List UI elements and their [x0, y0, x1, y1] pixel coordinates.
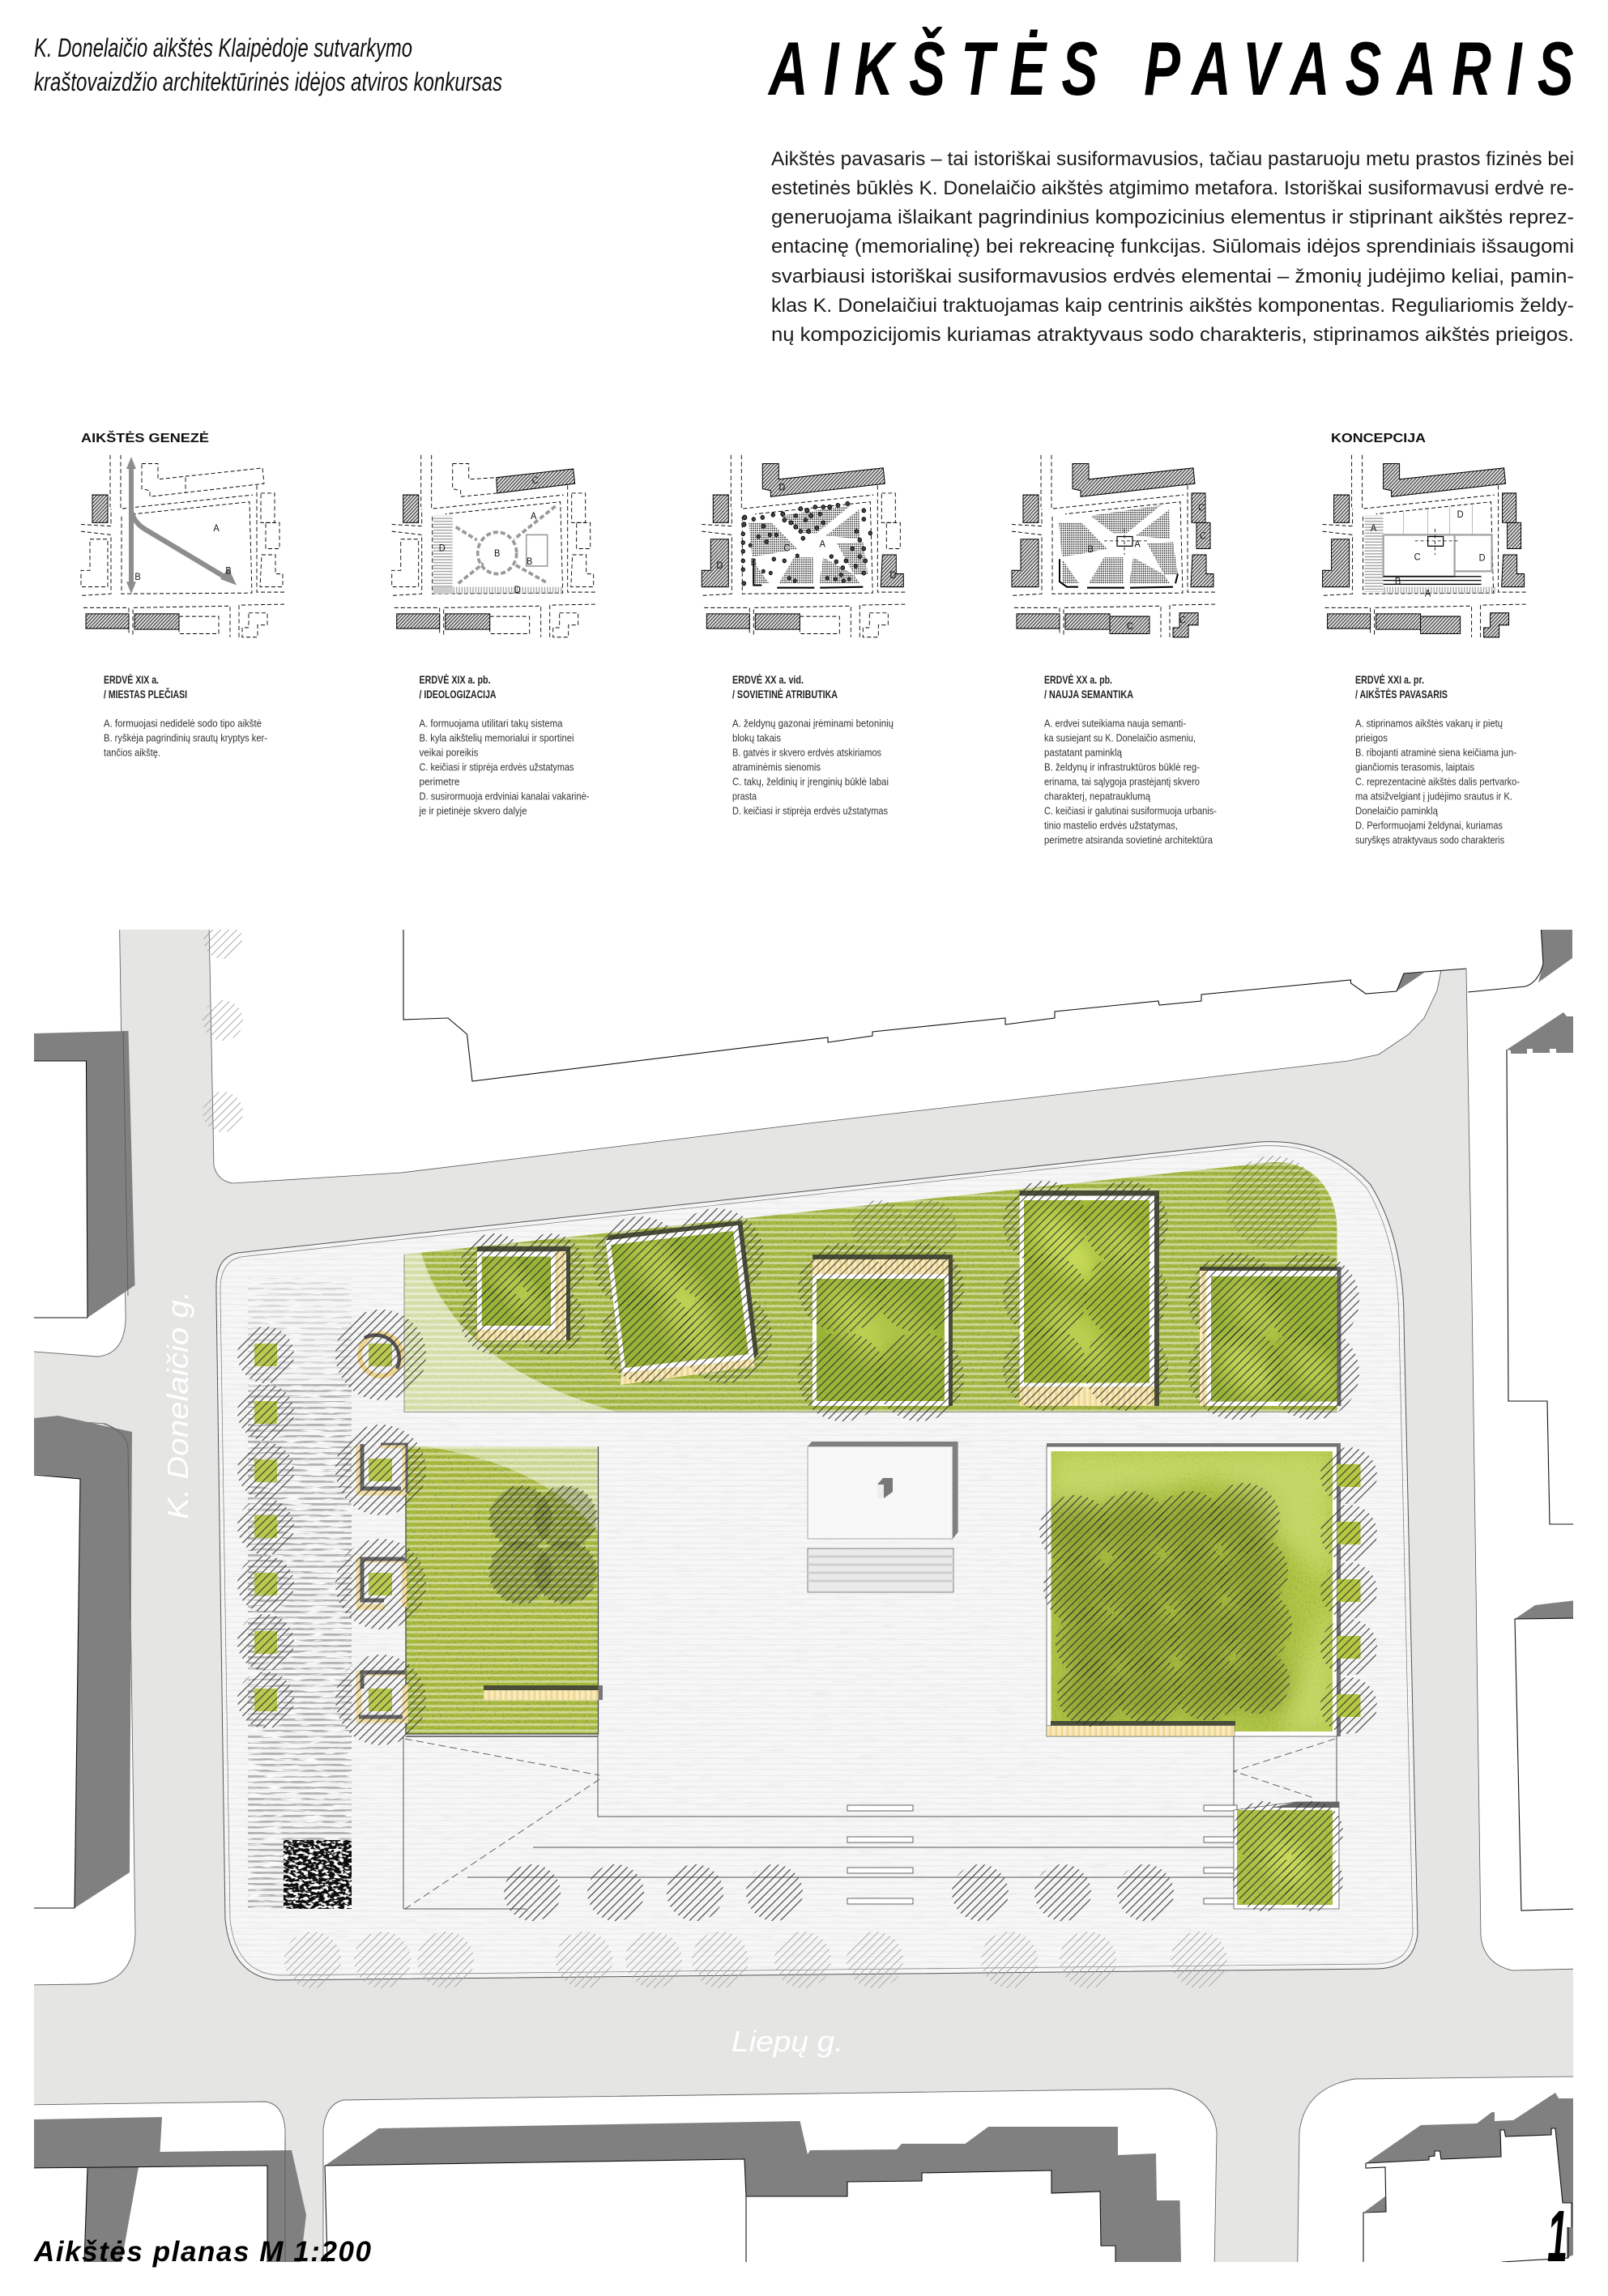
diagram 3: mid XX century: D [716, 561, 723, 571]
diagram 4: late XX century: C [1127, 622, 1133, 632]
tree pits right column [1320, 1447, 1377, 1734]
diagram 4: late XX century: C [1179, 616, 1186, 626]
caption column 4: tinio mastelio erdvės užstatymas, [1044, 820, 1178, 832]
plan scale caption: Aikštės planas M 1:200 [33, 2236, 372, 2268]
caption column 2: perimetre [420, 776, 460, 788]
text block: project description: Aikštės pavasaris – tai istoriškai susiformavusios, tačiau pastaruoju metu prastos fizinės bei [771, 148, 1574, 170]
caption column 5: giančiomis terasomis, laiptais [1355, 761, 1474, 773]
diagram 2: late XIX century: C [532, 476, 539, 486]
caption column 5: D. Performuojami želdynai, kuriamas [1355, 820, 1503, 832]
caption column 5: prieigos [1355, 732, 1388, 743]
caption column 4: erinama, tai sąlygoja prastėjantį skvero [1044, 776, 1200, 788]
text block: project description: nų kompozicijomis kuriamas atraktyvaus sodo charakteris, stiprinamos aikštės prieigos. [771, 324, 1574, 346]
street label: K. Donelaičio g.: K. Donelaičio g. [161, 1291, 194, 1519]
caption column 1: ERDVĖ XIX a. [104, 673, 159, 686]
caption column 3 [732, 673, 894, 817]
caption column 1: tančios aikštę. [104, 747, 160, 758]
diagram 2: late XIX century: B [494, 549, 500, 559]
diagram 4: late XX century: C [1200, 531, 1206, 542]
caption column 2: D. susirormuoja erdviniai kanalai vakarinė- [420, 790, 590, 803]
diagram 2: late XIX century: D [514, 586, 521, 595]
caption column 5 [1355, 673, 1520, 846]
left panel frame and wooden bench [406, 1446, 603, 1736]
caption column 2 [419, 673, 590, 817]
caption column 4: C. keičiasi ir galutinai susiformuoja urbanis- [1044, 805, 1217, 817]
diagram 3: mid XX century: B [751, 558, 757, 568]
text block: project description: estetinės būklės K. Donelaičio aikštės atgimimo metafora. Istoriškai susiformavusi erdvė re- [771, 177, 1574, 199]
diagram 1: XIX century: A [213, 524, 220, 534]
diagram 4: late XX century [1012, 455, 1216, 637]
caption column 2: B. kyla aikštelių memorialui ir sportinei [420, 732, 574, 743]
caption column 5: B. ribojanti atraminė siena keičiama jun- [1355, 747, 1516, 758]
caption column 5: A. stiprinamos aikštės vakarų ir pietų [1355, 718, 1503, 729]
caption column 2: C. keičiasi ir stiprėja erdvės užstatymas [420, 761, 574, 773]
caption column 5: Donelaičio paminklą [1355, 805, 1439, 817]
city blocks and surrounding buildings [24, 923, 1580, 2272]
diagram 1: XIX century [81, 455, 285, 637]
caption column 3: ERDVĖ XX a. vid. [732, 673, 804, 686]
caption column 2: / IDEOLOGIZACIJA [420, 688, 496, 701]
caption column 1: B. ryškėja pagrindinių srautų kryptys ker- [104, 732, 267, 743]
heading: genesis section: AIKŠTĖS GENEZĖ [81, 430, 209, 445]
diagram 2: late XIX century [392, 455, 596, 637]
caption column 3: B. gatvės ir skvero erdvės atskiriamos [732, 747, 881, 758]
diagram 2: late XIX century: B [527, 556, 532, 567]
caption column 1: / MIESTAS PLEČIASI [104, 687, 187, 701]
caption column 4: charakterį, nepatrauklumą [1044, 790, 1151, 803]
terrace lines and stairs [403, 1734, 1337, 1909]
band lawn bottom edge [404, 1254, 1337, 1412]
diagram 4: late XX century: C [1198, 503, 1205, 513]
diagram 4: late XX century: B [1087, 544, 1094, 555]
diagram 3: mid XX century [702, 455, 906, 637]
paving strip along Donelaičio street [248, 1278, 352, 1910]
text block: project description: svarbiausi istoriškai susiformavusios erdvės elementai – žmonių judėjimo keliai, pamin- [771, 266, 1574, 288]
diagram 3: mid XX century: C [783, 543, 790, 554]
caption column 4: / NAUJA SEMANTIKA [1044, 688, 1133, 701]
caption column 4: B. želdynų ir infrastruktūros būklė reg- [1044, 761, 1200, 773]
mottled dark paving block [284, 1840, 352, 1909]
caption column 1 [104, 673, 267, 758]
planter C [798, 1243, 964, 1421]
diagram 5: concept XXI century: D [1457, 510, 1464, 520]
caption column 1: A. formuojasi nedidelė sodo tipo aikštė [104, 718, 262, 729]
caption column 2: veikai poreikis [420, 747, 479, 758]
text block: project description: generuojama išlaikant pagrindinius kompozicinius elementus ir stiprinant aikštės reprez- [771, 207, 1574, 228]
caption column 5: C. reprezentacinė aikštės dalis pertvarko- [1355, 776, 1520, 788]
caption column 3: D. keičiasi ir stiprėja erdvės užstatymas [732, 805, 888, 817]
tree crowns over top lawn [851, 1156, 1320, 1254]
diagram 3: mid XX century: D [889, 571, 896, 581]
diagram 5: concept XXI century: D [1479, 553, 1486, 564]
caption column 5: suryškęs atraktyvaus sodo charakteris [1355, 834, 1504, 846]
caption column 4: ERDVĖ XX a. pb. [1044, 673, 1112, 686]
site plan [24, 920, 1580, 2272]
caption column 3: A. želdynų gazonai įrėminami betoninių [732, 718, 894, 729]
caption column 5: / AIKŠTĖS PAVASARIS [1355, 687, 1448, 701]
tree row: inner south alley [504, 1864, 1174, 1921]
caption column 5: ma atsižvelgiant į judėjimo srautus ir K. [1355, 790, 1512, 803]
diagram 5: concept XXI century: A [1425, 589, 1431, 599]
monument platform [808, 1442, 958, 1539]
caption column 2: ERDVĖ XIX a. pb. [420, 673, 491, 686]
planter E [1188, 1253, 1359, 1420]
tree row: Liepų street edge [284, 1932, 1227, 1988]
text block: project description: entacinę (memorialinę) bei rekreacinę funkcijas. Siūlomais idėjos sprendiniais išsaugomi [771, 236, 1574, 258]
subtitle: competition name [34, 33, 502, 96]
planter D [1003, 1181, 1168, 1411]
subtitle: competition name: K. Donelaičio aikštės Klaipėdoje sutvarkymo [34, 33, 412, 62]
plaza surface [211, 1134, 1426, 1984]
top lawn band [404, 1158, 1337, 1412]
diagram 3: mid XX century: D [778, 483, 785, 493]
text block: project description [771, 148, 1574, 346]
caption column 4 [1044, 673, 1217, 846]
diagram 1: XIX century: B [225, 566, 232, 577]
caption column 3: / SOVIETINĖ ATRIBUTIKA [732, 688, 838, 701]
caption column 3: C. takų, želdinių ir įrenginių būklė labai [732, 776, 889, 788]
caption column 5: ERDVĖ XXI a. pr. [1355, 673, 1424, 686]
diagram 5: concept XXI century: C [1414, 552, 1421, 563]
steps block [808, 1548, 953, 1592]
street label: Liepų g.: Liepų g. [731, 2025, 843, 2058]
caption column 4: A. erdvei suteikiama nauja semanti- [1044, 718, 1186, 729]
planter B tilted [593, 1208, 772, 1385]
caption column 3: prasta [732, 790, 757, 803]
diagram 1: XIX century: B [134, 573, 141, 582]
small planter lower right [1233, 1801, 1343, 1911]
caption column 3: atraminėmis sienomis [732, 761, 821, 773]
road surface [34, 930, 1573, 2262]
diagram 4: late XX century: A [1134, 539, 1141, 549]
heading: concept section: KONCEPCIJA [1331, 432, 1426, 445]
left panel tree canopy hatch [488, 1485, 598, 1604]
planter A [460, 1233, 585, 1354]
caption column 2: A. formuojama utilitari takų sistema [420, 718, 563, 729]
caption column 4: ka susiejant su K. Donelaičio asmeniu, [1044, 732, 1196, 743]
circular and square seats with trees [335, 1310, 426, 1745]
text block: project description: klas K. Donelaičiui traktuojamas kaip centrinis aikštės komponentas. Reguliariomis želdy- [771, 295, 1574, 317]
diagram 2: late XIX century: A [531, 512, 537, 522]
caption column 4: pastatant paminklą [1044, 747, 1123, 758]
title: AIKŠTĖS PAVASARIS [767, 27, 1574, 112]
caption column 3: blokų takais [732, 732, 781, 743]
caption column 4: perimetre atsiranda sovietinė architektūra [1044, 834, 1213, 846]
sheet number: 1 [1547, 2196, 1567, 2277]
diagram 2: late XIX century: D [439, 543, 446, 554]
tree pits left column [237, 1327, 294, 1728]
right lawn panel [1039, 1443, 1341, 1736]
left lawn panel [406, 1446, 598, 1734]
diagram 5: concept XXI century [1323, 455, 1527, 637]
diagram 5: concept XXI century: A [1371, 524, 1377, 534]
street trees top left [203, 920, 243, 1132]
subtitle: competition name: kraštovaizdžio architektūrinės idėjos atviros konkursas [34, 67, 502, 96]
caption column 2: je ir pietinėje skvero dalyje [419, 805, 527, 817]
diagram 5: concept XXI century: B [1395, 577, 1401, 587]
diagram 3: mid XX century: A [820, 539, 825, 549]
